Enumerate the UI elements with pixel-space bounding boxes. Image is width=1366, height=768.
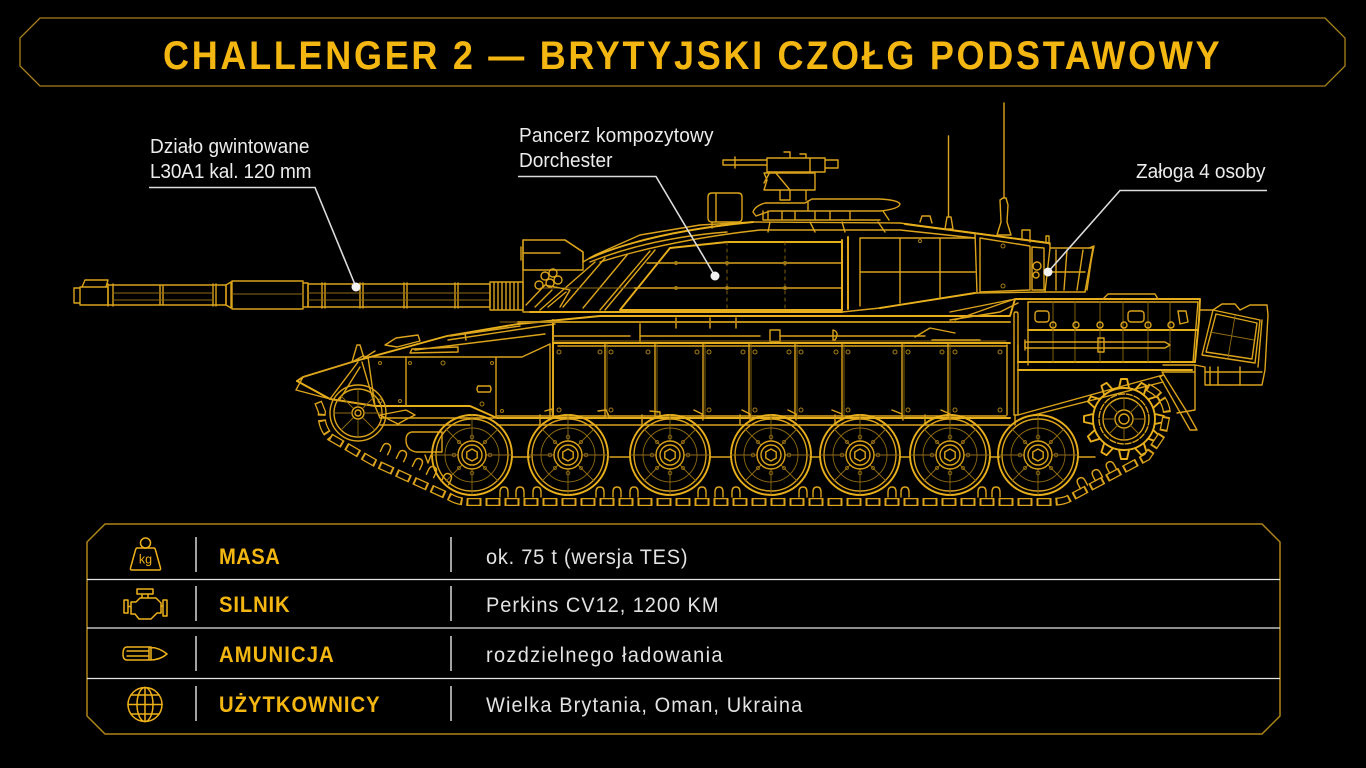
stowage box: [708, 193, 742, 228]
callout: crew: [1044, 160, 1267, 276]
row: ammunition: rozdzielnego ładowania: [486, 643, 723, 667]
icon: globe: [128, 688, 162, 722]
callout: gun: [149, 135, 360, 292]
row: engine: SILNIK: [219, 592, 290, 617]
front hull and mudguard: [296, 345, 500, 463]
callout: armour: Pancerz kompozytowy: [519, 124, 714, 147]
road wheel 3: [630, 415, 710, 495]
side skirt armour: [368, 343, 1010, 420]
row: engine: [124, 589, 718, 619]
turret: [521, 103, 1094, 312]
rear hull plate and mudflap: [1160, 365, 1197, 430]
row: ammunition: AMUNICJA: [219, 642, 334, 667]
road wheel 5: [820, 415, 900, 495]
icon: weight: kg: [139, 552, 152, 566]
row: ammunition: [123, 642, 723, 667]
idler wheel: [330, 385, 386, 441]
callout: armour: [518, 124, 720, 281]
row: users: Wielka Brytania, Oman, Ukraina: [486, 693, 803, 717]
hull upper deck: [297, 294, 1268, 415]
icon: engine: [124, 589, 167, 619]
callout: gun: Działo gwintowane: [150, 135, 309, 158]
gun barrel: [74, 280, 523, 310]
smoke dischargers: [526, 269, 570, 307]
running gear and road wheels: [432, 375, 1163, 495]
callout: gun: L30A1 kal. 120 mm: [150, 160, 312, 183]
road wheel 4: [731, 415, 811, 495]
icon: bullet: [123, 647, 167, 660]
engine deck: [1014, 302, 1198, 415]
tank line drawing: [74, 103, 1268, 502]
rear stowage bin: [1195, 304, 1268, 385]
track: [318, 387, 1167, 502]
road wheel 2: [528, 415, 608, 495]
icon: weight: [130, 538, 161, 570]
drive sprocket: [1084, 379, 1164, 459]
row: engine: Perkins CV12, 1200 KM: [486, 593, 719, 617]
row: mass: [130, 538, 688, 570]
road wheel 6: [910, 415, 990, 495]
title banner: [20, 18, 1345, 86]
row: users: [128, 688, 803, 722]
row: mass: MASA: [219, 544, 280, 569]
row: mass: ok. 75 t (wersja TES): [486, 545, 688, 569]
callout: armour: Dorchester: [519, 149, 613, 172]
specification table: [87, 524, 1280, 734]
callout: crew: Załoga 4 osoby: [1136, 160, 1266, 183]
road wheel 1: [432, 415, 512, 495]
machine gun: [723, 152, 838, 172]
cupola: [753, 199, 900, 216]
title: CHALLENGER 2 — BRYTYJSKI CZOŁG PODSTAWOWY: [163, 34, 1220, 78]
row: users: UŻYTKOWNICY: [219, 692, 380, 717]
antenna: [945, 136, 953, 229]
antenna: [997, 103, 1011, 235]
road wheel 7: [998, 415, 1078, 495]
